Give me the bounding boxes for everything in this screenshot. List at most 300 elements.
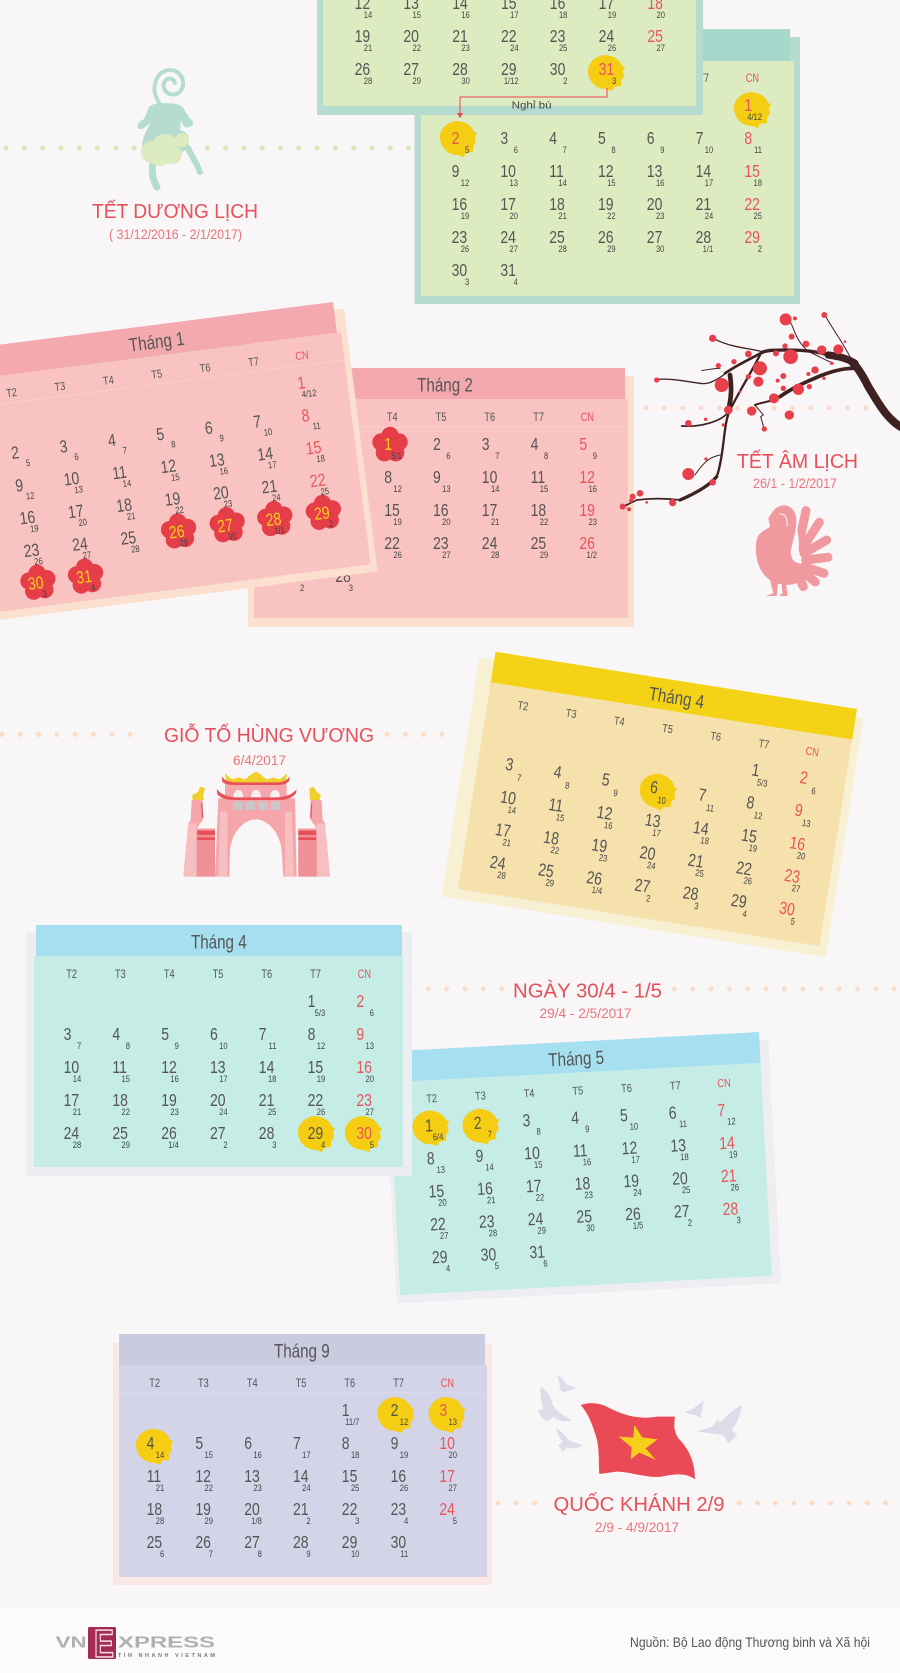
icon: monkey [137,70,200,187]
calendar: April 2017 teal: T2 [66,969,77,981]
calendar: December 2016 green: 28 [364,75,372,86]
calendar: February 2017 pink: 3 [482,436,490,454]
calendar: February 2017 pink: 28 [335,568,351,586]
calendar: February 2017 pink: 15 [540,483,548,494]
calendar: September 2017 lavender: 13 [244,1468,260,1486]
calendar: September 2017 lavender: 5 [195,1435,203,1453]
calendar: January 2017 green: 23 [452,229,467,247]
calendar: September 2017 lavender: 5 [453,1515,457,1526]
calendar: January 2017 pink: 27 [216,516,234,537]
calendar: September 2017 lavender: 6 [244,1435,252,1453]
calendar: April 2017 teal: 5/3 [315,1007,325,1018]
calendar: January 2017 pink: 10 [263,426,273,438]
heading: Quoc Khanh [554,1492,724,1535]
calendar: April 2017 teal: 15 [122,1073,130,1084]
calendar: September 2017 lavender: 14 [293,1468,309,1486]
calendar: January 2017 pink: 15 [170,471,180,483]
calendar: February 2017 pink: 15 [384,502,400,520]
calendar: January 2017 green: 20 [647,196,663,214]
calendar: September 2017 lavender: 26 [400,1482,408,1493]
calendar: December 2016 green: 21 [452,28,468,46]
calendar: January 2017 green: 5 [465,144,469,155]
calendar: January 2017 green: 14 [558,177,567,188]
calendar: May 2017 teal: 13 [436,1164,445,1175]
calendar: April 2017 yellow: 22 [550,844,560,856]
calendar: April 2017 yellow: 4 [552,763,563,783]
calendar: December 2016 green: 14 [364,9,372,20]
calendar: May 2017 teal: 10 [629,1121,639,1132]
calendar: April 2017 teal: 9 [175,1040,179,1051]
calendar: January 2017 pink: 17 [267,459,277,471]
calendar: February 2017 pink: T4 [387,412,398,424]
calendar: May 2017 teal: 7 [717,1102,726,1121]
calendar: September 2017 lavender: 23 [253,1482,262,1493]
calendar: April 2017 teal: 2 [356,993,364,1011]
calendar: April 2017 yellow: T2 [517,700,529,714]
calendar: April 2017 teal: 24 [64,1125,79,1143]
calendar: September 2017 lavender: 30 [391,1534,406,1552]
calendar: January 2017 pink: 2 [328,518,334,529]
calendar: December 2016 green: 2 [563,75,568,86]
calendar: January 2017 pink: 23 [223,498,233,510]
calendar: May 2017 teal: 8 [536,1126,541,1137]
calendar: September 2017 lavender: 1 [342,1402,350,1420]
calendar: May 2017 teal: 10 [524,1144,540,1164]
calendar: May 2017 teal: T4 [523,1088,535,1101]
calendar: December 2016 green: 27 [403,61,419,79]
calendar: September 2017 lavender [113,1334,492,1585]
calendar: May 2017 teal: 4 [446,1263,451,1274]
heading: Tet Am Lich: 26/1 - 1/2/2017 [753,475,837,491]
heading: Tet Am Lich: TẾT ÂM LỊCH [737,450,858,473]
calendar: April 2017 teal: 26 [317,1106,325,1117]
calendar: January 2017 pink: 10 [63,469,81,490]
calendar: May 2017 teal: 28 [488,1227,498,1239]
calendar: May 2017 teal: 31 [529,1243,546,1263]
calendar: January 2017 pink: 21 [126,510,136,522]
calendar: April 2017 yellow: 5 [790,915,796,927]
calendar: September 2017 lavender: 28 [293,1534,309,1552]
calendar: April 2017 teal: 15 [308,1059,323,1077]
calendar: April 2017 yellow: T5 [661,723,674,737]
calendar: May 2017 teal: 26 [730,1181,740,1193]
calendar: September 2017 lavender: 22 [205,1482,213,1493]
calendar: September 2017 lavender: 11 [400,1548,408,1559]
calendar: May 2017 teal: 5 [620,1107,628,1126]
calendar: September 2017 lavender: 8 [258,1548,262,1559]
calendar: February 2017 pink: 26 [393,549,402,560]
calendar: April 2017 teal: 10 [64,1059,79,1077]
calendar: May 2017 teal: 3 [736,1214,741,1226]
calendar: September 2017 lavender: 12 [400,1416,408,1427]
calendar: January 2017 pink: 28 [130,543,140,555]
calendar: January 2017 green: 15 [744,163,760,181]
calendar: April 2017 teal: 27 [210,1125,226,1143]
calendar: April 2017 yellow: 24 [646,859,657,872]
calendar: January 2017 pink: 16 [219,465,229,477]
calendar: September 2017 lavender: 25 [351,1482,360,1493]
calendar: February 2017 pink: 2 [300,582,304,593]
calendar: May 2017 teal: 29 [432,1248,448,1268]
calendar: September 2017 lavender: 17 [302,1449,311,1460]
calendar: April 2017 yellow: 21 [687,851,705,872]
calendar: May 2017 teal: 18 [680,1151,689,1162]
calendar: January 2017 green: 1/1 [703,243,713,254]
logo: VnExpress: XPRESS [118,1634,215,1652]
calendar: April 2017 yellow: 26 [743,875,753,887]
calendar: January 2017 green: 16 [452,196,467,214]
calendar: April 2017 yellow: 28 [497,869,507,881]
calendar: December 2016 green: 20 [657,9,665,20]
calendar: January 2017 pink: 24 [71,535,89,555]
calendar: April 2017 teal: 3 [272,1139,277,1150]
calendar: February 2017 pink: 20 [442,516,451,527]
calendar: May 2017 teal: 12 [621,1139,638,1159]
calendar: May 2017 teal: 24 [633,1187,642,1198]
calendar: May 2017 teal: T3 [475,1091,486,1103]
calendar: April 2017 teal: 1 [308,993,316,1011]
calendar: April 2017 teal: 11 [269,1040,277,1051]
calendar: December 2016 green: 17 [510,9,519,20]
calendar: April 2017 teal: 10 [219,1040,228,1051]
calendar: September 2017 lavender: 26 [195,1534,211,1552]
calendar: January 2017 pink: 22 [175,504,185,516]
calendar: December 2016 green: 25 [647,28,663,46]
calendar: September 2017 lavender: 15 [342,1468,358,1486]
calendar: May 2017 teal: 2 [688,1217,693,1228]
calendar: January 2017 green: 22 [607,210,616,221]
calendar: February 2017 pink: 28 [491,549,500,560]
calendar: April 2017 yellow: 5 [600,771,611,791]
calendar: May 2017 teal: 12 [727,1116,736,1127]
calendar: September 2017 lavender: 27 [244,1534,260,1552]
calendar: January 2017 green: 27 [510,243,518,254]
calendar: April 2017 yellow: T7 [758,738,770,752]
calendar: January 2017 green: 23 [656,210,665,221]
calendar: April 2017 teal: 26 [161,1125,177,1143]
source note: Nguồn: Bộ Lao động Thương binh và Xã hội [630,1635,870,1650]
calendar: February 2017 pink: 22 [384,535,400,553]
calendar: February 2017 pink: 17 [482,502,497,520]
calendar: January 2017 green: 8 [611,144,616,155]
calendar: January 2017 pink: T6 [199,362,212,376]
calendar: January 2017 pink: 25 [320,485,330,497]
calendar: January 2017 green: CN [746,73,759,85]
logo: VnExpress: E [94,1623,114,1666]
calendar: September 2017 lavender: 4 [404,1515,408,1526]
calendar: December 2016 green: 28 [452,61,468,79]
calendar: April 2017 yellow: 22 [735,859,753,880]
calendar: January 2017 pink: 6 [74,451,79,462]
calendar: February 2017 pink: 2 [433,436,441,454]
calendar: September 2017 lavender: 14 [156,1449,164,1460]
calendar: April 2017 teal: 28 [259,1125,275,1143]
calendar: January 2017 pink: T4 [102,375,115,388]
calendar: September 2017 lavender: 6 [160,1548,164,1559]
calendar: December 2016 green: 23 [461,42,470,53]
calendar: January 2017 pink: 22 [309,471,327,492]
calendar: January 2017 green: 30 [452,262,467,280]
calendar: April 2017 yellow: 15 [555,811,565,824]
calendar: January 2017 green: 12 [598,163,614,181]
calendar: January 2017 green: 10 [500,163,516,181]
calendar: April 2017 yellow: 19 [590,836,609,857]
calendar: April 2017 teal: 14 [73,1073,81,1084]
calendar: December 2016 green: 15 [413,9,421,20]
calendar: January 2017 green: 29 [607,243,616,254]
calendar: April 2017 yellow: 21 [502,836,512,849]
calendar: February 2017 pink: 14 [491,483,500,494]
heading: Tet Duong Lich: TẾT DƯƠNG LỊCH [92,200,258,223]
calendar: May 2017 teal: 5 [494,1260,499,1271]
calendar: April 2017 teal: 18 [112,1092,128,1110]
calendar: January 2017 green: 7 [563,144,567,155]
calendar: April 2017 yellow: 18 [700,834,710,847]
calendar: January 2017 pink: 29 [179,537,189,549]
calendar: December 2016 green: 31 [599,61,614,79]
calendar: January 2017 green: 26 [598,229,614,247]
icon: blossom branch [620,312,900,511]
calendar: April 2017 yellow: 29 [545,877,555,889]
calendar: September 2017 lavender: 9 [306,1548,311,1559]
calendar: February 2017 pink: 7 [495,450,500,461]
calendar: April 2017 yellow: 1/4 [591,884,603,897]
calendar: May 2017 teal: 28 [722,1200,739,1220]
calendar: January 2017 pink: T7 [248,356,260,370]
calendar: January 2017 green: 18 [549,196,565,214]
calendar: January 2017 green: 13 [647,163,663,181]
calendar: January 2017 pink: 14 [256,445,274,465]
calendar: April 2017 teal: 16 [170,1073,179,1084]
calendar: May 2017 teal: 2 [473,1114,482,1133]
calendar: September 2017 lavender: 22 [342,1501,357,1519]
calendar: May 2017 teal: 17 [526,1177,542,1197]
calendar: April 2017 teal: 5 [370,1139,374,1150]
calendar: January 2017 green: 11 [549,163,564,181]
calendar: May 2017 teal: 9 [585,1123,590,1134]
calendar: April 2017 yellow: 14 [507,804,517,816]
calendar: May 2017 teal: 30 [586,1222,595,1234]
calendar: September 2017 lavender: 20 [449,1449,457,1460]
calendar: January 2017 green: 25 [754,210,762,221]
calendar: January 2017 pink: 30 [227,530,237,542]
calendar: January 2017 green: 24 [500,229,516,247]
calendar: January 2017 green: T7 [698,73,709,85]
heading: Quoc Khanh: QUỐC KHÁNH 2/9 [554,1492,724,1516]
calendar: December 2016 green: 30 [461,75,470,86]
calendar: December 2016 green: 25 [559,42,568,53]
calendar: January 2017 pink: 12 [160,457,177,478]
calendar: January 2017 pink: 11 [111,463,128,484]
calendar: January 2017 green: 3 [500,130,508,148]
calendar: May 2017 teal: 11 [679,1118,687,1130]
calendar: January 2017 green: 17 [500,196,516,214]
calendar: April 2017 yellow: 26 [585,869,603,890]
calendar: April 2017 yellow: 27 [633,876,651,897]
calendar: September 2017 lavender: 7 [293,1435,301,1453]
calendar: September 2017 lavender: 7 [209,1548,213,1559]
calendar: January 2017 pink: 4/12 [301,387,317,400]
calendar: April 2017 teal: 22 [122,1106,130,1117]
calendar: April 2017 teal: CN [358,969,371,981]
calendar: January 2017 pink: 3 [42,588,48,599]
calendar: September 2017 lavender: 18 [351,1449,360,1460]
calendar: May 2017 teal: CN [717,1078,731,1091]
calendar: December 2016 green: 22 [501,28,517,46]
calendar: April 2017 teal [26,925,412,1176]
calendar: April 2017 teal: 13 [210,1059,226,1077]
calendar: January 2017 pink: 23 [23,541,41,562]
calendar: April 2017 teal: 2 [223,1139,228,1150]
calendar: February 2017 pink: 25 [531,535,546,553]
calendar: December 2016 green: 22 [413,42,421,53]
calendar: January 2017 green: 25 [549,229,565,247]
heading: Gio To Hung Vuong: 6/4/2017 [233,752,286,768]
calendar: February 2017 pink: 6 [446,450,451,461]
calendar: April 2017 yellow: 9 [793,801,804,821]
calendar: May 2017 teal: T2 [426,1093,438,1106]
calendar: January 2017 green: 18 [754,177,762,188]
calendar: May 2017 teal: 25 [576,1208,593,1227]
calendar: January 2017 pink: T3 [54,381,66,394]
heading: Tet Am Lich [737,450,858,491]
calendar: February 2017 pink: 19 [579,502,595,520]
calendar: February 2017 pink: Tháng 2 [417,374,473,396]
calendar: April 2017 yellow: 1 [750,761,761,781]
calendar: September 2017 lavender: 10 [351,1548,360,1559]
calendar: April 2017 yellow: 3 [504,755,515,775]
calendar: September 2017 lavender: 2 [391,1402,398,1420]
heading: Ngay 30/4 - 1/5: NGÀY 30/4 - 1/5 [513,980,662,1002]
calendar: April 2017 teal: 4 [112,1026,120,1044]
calendar: May 2017 teal: 3 [522,1112,531,1131]
calendar: April 2017 teal: 1/4 [168,1139,179,1150]
calendar: September 2017 lavender: 23 [391,1501,406,1519]
calendar: April 2017 yellow: 2 [798,769,809,788]
calendar: February 2017 pink [248,368,634,627]
calendar: April 2017 yellow: 30 [778,899,796,920]
calendar: January 2017 pink: 26 [34,555,44,567]
calendar: April 2017 yellow: 13 [644,811,662,832]
calendar: February 2017 pink: 5/1 [391,450,402,461]
heading: Ngay 30/4 - 1/5 [513,980,662,1021]
calendar: April 2017 yellow: 18 [542,828,560,849]
calendar: April 2017 teal: 8 [308,1026,316,1044]
calendar: January 2017 green: 16 [656,177,665,188]
calendar: April 2017 teal: T3 [115,969,126,981]
calendar: September 2017 lavender: 16 [391,1468,406,1486]
calendar: April 2017 teal: 4 [321,1139,325,1150]
calendar: September 2017 lavender: 8 [342,1435,350,1453]
calendar: January 2017 pink: 31 [75,568,93,588]
calendar: May 2017 teal: 17 [631,1154,640,1165]
calendar: May 2017 teal: 26 [625,1205,641,1225]
calendar: April 2017 yellow: 13 [801,817,812,829]
calendar: May 2017 teal: 6 [543,1258,548,1269]
calendar: April 2017 yellow: 17 [494,821,512,842]
calendar: April 2017 yellow: 23 [598,852,608,864]
calendar: January 2017 green: 11 [754,144,762,155]
calendar: May 2017 teal: 29 [537,1225,546,1236]
calendar: April 2017 teal: 11 [112,1059,127,1077]
calendar: April 2017 yellow: 11 [705,802,715,814]
calendar: April 2017 teal: 22 [308,1092,323,1110]
calendar: January 2017 green: 2 [758,243,762,254]
calendar: May 2017 teal: 27 [440,1230,449,1241]
calendar: May 2017 teal: 8 [426,1150,435,1169]
calendar: January 2017 pink: 19 [29,522,39,534]
calendar: January 2017 pink: 25 [120,529,138,549]
calendar: April 2017 teal: 3 [64,1026,72,1044]
calendar: September 2017 lavender: CN [441,1378,454,1390]
calendar: January 2017 green: 31 [500,262,516,280]
calendar: April 2017 teal: 20 [210,1092,226,1110]
calendar: January 2017 pink: 6 [204,419,214,439]
icon: Vietnam flag [581,1403,695,1479]
calendar: January 2017 green: 10 [705,144,713,155]
calendar: September 2017 lavender: T2 [149,1378,160,1390]
calendar: April 2017 yellow: 6 [811,785,817,797]
calendar: April 2017 teal: 28 [73,1139,81,1150]
calendar: April 2017 teal: 14 [259,1059,275,1077]
calendar: January 2017 green: 14 [696,163,711,181]
calendar: January 2017 green: 15 [607,177,616,188]
calendar: April 2017 teal: T7 [310,969,321,981]
calendar: May 2017 teal: 9 [475,1147,484,1166]
calendar: February 2017 pink: 23 [433,535,449,553]
calendar: January 2017 pink: 13 [208,451,226,471]
calendar: April 2017 yellow: 2 [645,893,651,904]
calendar: May 2017 teal: T7 [670,1080,681,1093]
calendar: February 2017 pink: 10 [482,469,498,487]
calendar: April 2017 teal: 17 [219,1073,228,1084]
calendar: January 2017 green: 21 [696,196,711,214]
calendar: May 2017 teal: 23 [479,1213,495,1232]
calendar: September 2017 lavender: 11/7 [345,1416,360,1427]
calendar: April 2017 teal: 27 [366,1106,374,1117]
calendar: May 2017 teal: 23 [584,1189,593,1201]
calendar: January 2017 pink: 12 [25,490,35,502]
calendar: April 2017 teal: T6 [261,969,272,981]
calendar: February 2017 pink: 22 [540,516,548,527]
calendar: April 2017 teal: 19 [161,1092,177,1110]
calendar: February 2017 pink: 26 [579,535,595,553]
calendar: January 2017 pink: 5 [155,425,166,445]
calendar: September 2017 lavender: 18 [147,1501,162,1519]
calendar: September 2017 lavender: 25 [147,1534,162,1552]
calendar: September 2017 lavender: 19 [195,1501,211,1519]
calendar: April 2017 yellow: T6 [709,731,722,744]
heading: Quoc Khanh: 2/9 - 4/9/2017 [595,1519,679,1535]
calendar: September 2017 lavender: 16 [253,1449,262,1460]
calendar: April 2017 teal: 6 [210,1026,218,1044]
calendar: January 2017 pink: 8 [170,438,176,450]
calendar: January 2017 pink: CN [295,350,309,363]
calendar: January 2017 pink: 11 [312,420,321,432]
calendar: April 2017 teal: 18 [268,1073,277,1084]
calendar: May 2017 teal: 14 [485,1161,494,1173]
calendar: April 2017 yellow: 8 [745,794,756,813]
calendar: January 2017 pink: 7 [252,413,262,432]
calendar: April 2017 yellow: 19 [748,842,758,854]
calendar: May 2017 teal: T6 [621,1083,632,1096]
calendar: September 2017 lavender: 4 [147,1435,155,1453]
calendar: April 2017 teal: 29 [308,1125,323,1143]
calendar: September 2017 lavender: T6 [344,1378,355,1390]
calendar: January 2017 pink: 21 [261,477,279,498]
calendar: January 2017 pink: 14 [122,477,132,489]
calendar: February 2017 pink: 18 [531,502,546,520]
